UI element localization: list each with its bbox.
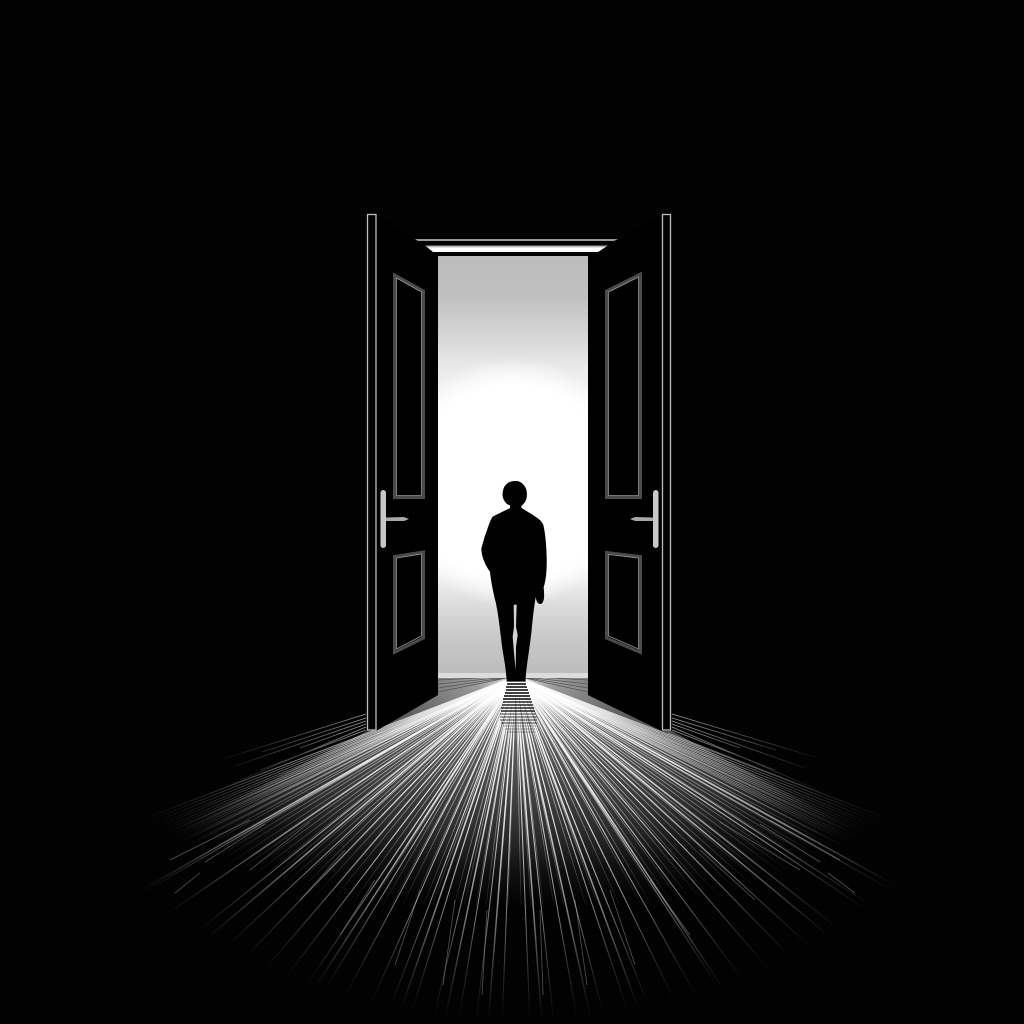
door edge strip — [662, 214, 670, 730]
upper panel — [394, 275, 424, 498]
floor base wedge — [0, 673, 1024, 1024]
head — [503, 481, 527, 509]
door leaf — [376, 214, 438, 731]
door leaf — [588, 214, 662, 731]
lower panel — [606, 552, 640, 652]
floor light rays — [0, 673, 1024, 1024]
lintel line — [415, 239, 618, 241]
thin dense rays — [6, 676, 1021, 906]
silhouette of person — [481, 481, 547, 682]
lintel light — [415, 239, 618, 252]
side rays right — [668, 714, 845, 802]
left door — [368, 214, 438, 731]
handle — [380, 490, 409, 548]
door edge strip — [368, 214, 376, 730]
horizon band — [438, 673, 588, 678]
shallow rays along the door edges — [16, 676, 1016, 906]
side rays left — [190, 714, 370, 800]
gap between legs — [513, 604, 518, 670]
lower panel — [394, 552, 424, 652]
bright central rays — [96, 676, 951, 1024]
doorway light — [438, 256, 588, 673]
shallow rays in doorway — [438, 676, 588, 692]
light slit — [425, 246, 608, 252]
right door — [588, 214, 670, 731]
handle — [630, 490, 658, 548]
sparse long rays — [16, 676, 1016, 1024]
detached streaks — [170, 820, 855, 995]
body — [481, 508, 547, 682]
upper panel — [606, 274, 640, 498]
floor reflection under feet — [500, 684, 537, 732]
